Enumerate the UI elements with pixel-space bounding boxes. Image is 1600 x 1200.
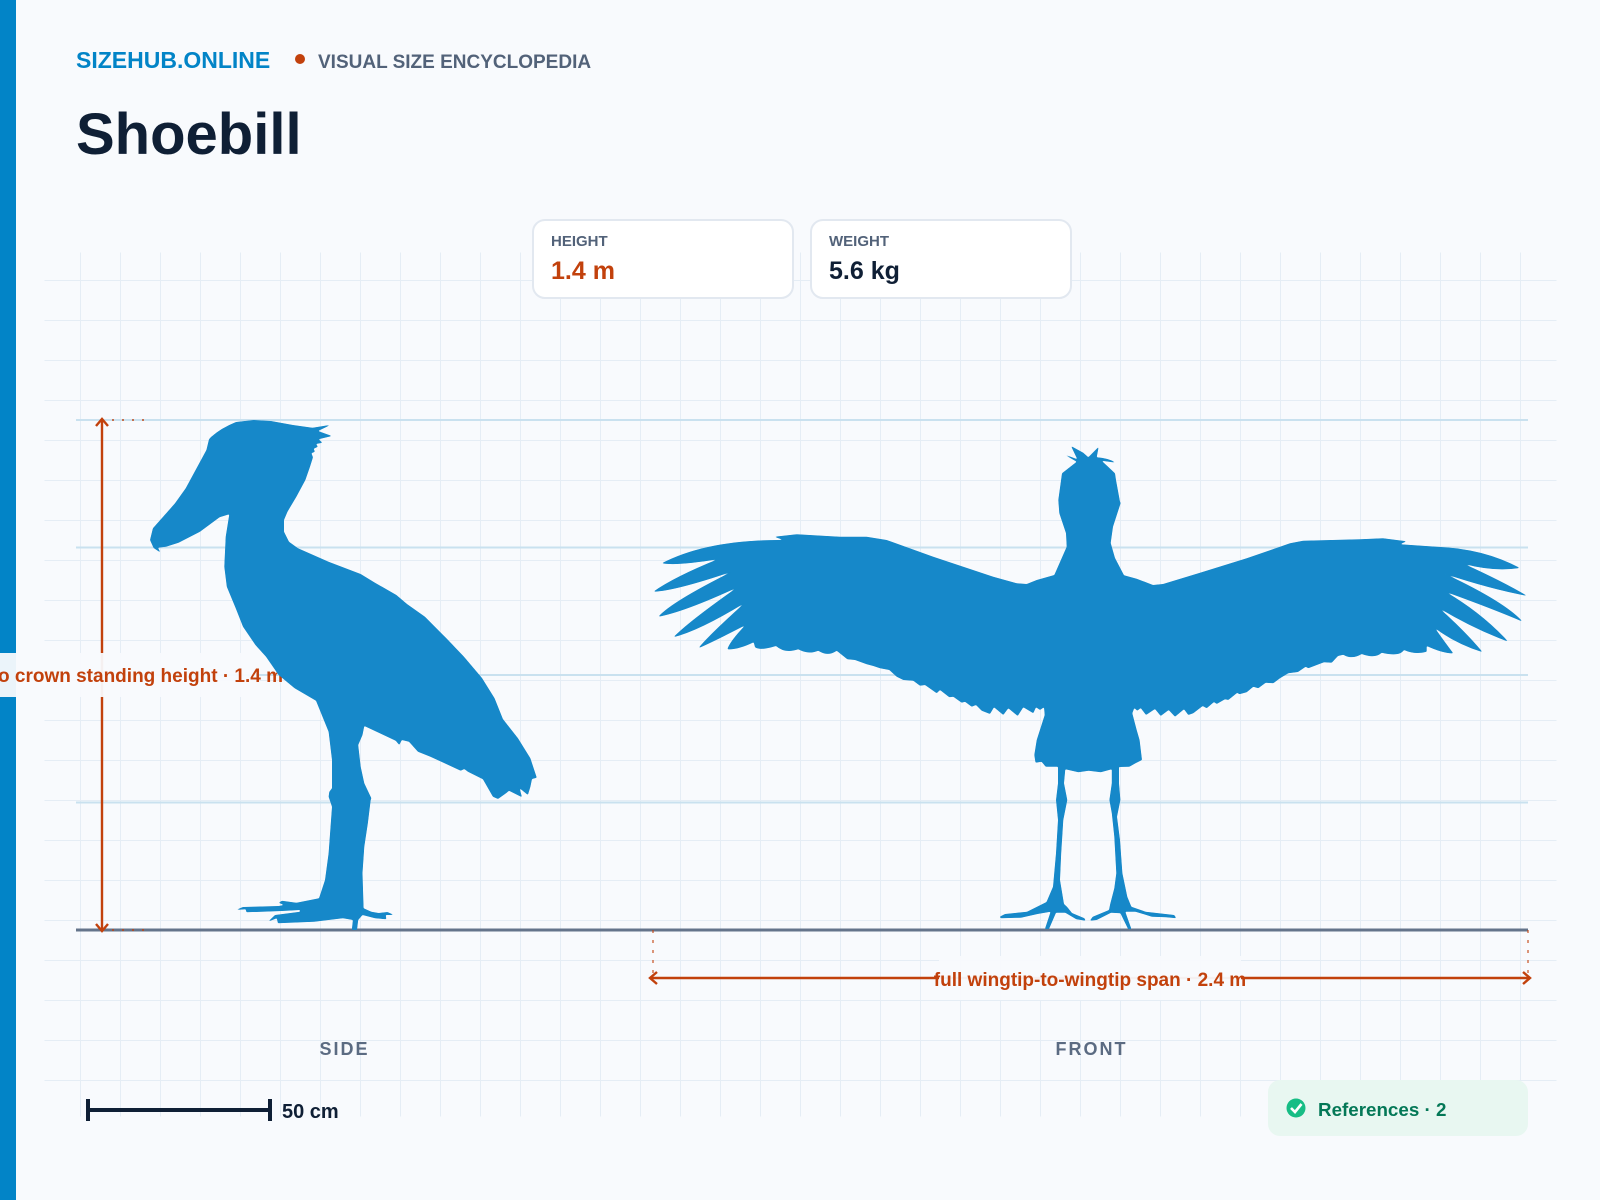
references badge: References · 2 (1318, 1099, 1446, 1120)
scale bar (88, 1099, 339, 1123)
title: Shoebill (76, 102, 302, 167)
stat card: weight (811, 220, 1071, 298)
height dimension label (0, 653, 283, 697)
left accent bar (0, 0, 16, 1200)
stat card: height (533, 220, 793, 298)
silhouette: front view with spread wings (653, 446, 1527, 929)
view label: side: SIDE (320, 1039, 370, 1059)
stat card: height: 1.4 m (551, 257, 615, 285)
icon: check circle (1286, 1098, 1306, 1118)
stat card: height: HEIGHT (551, 233, 608, 250)
references badge (1268, 1080, 1528, 1136)
height dimension arrow (96, 419, 146, 931)
ground line (76, 928, 1528, 932)
stat card: weight: WEIGHT (829, 233, 889, 250)
header (76, 47, 591, 167)
brand dot (295, 54, 305, 64)
tagline: VISUAL SIZE ENCYCLOPEDIA (318, 52, 591, 73)
scale bar: 50 cm (282, 1101, 339, 1123)
wingspan dimension label (934, 956, 1246, 1000)
brand name: SIZEHUB.ONLINE (76, 47, 270, 73)
wingspan dimension label: full wingtip-to-wingtip span · 2.4 m (934, 970, 1246, 991)
silhouette: side view (150, 420, 537, 930)
view label: front: FRONT (1056, 1039, 1128, 1059)
stat card: weight: 5.6 kg (829, 257, 900, 285)
wingspan dimension arrow (650, 930, 1530, 984)
